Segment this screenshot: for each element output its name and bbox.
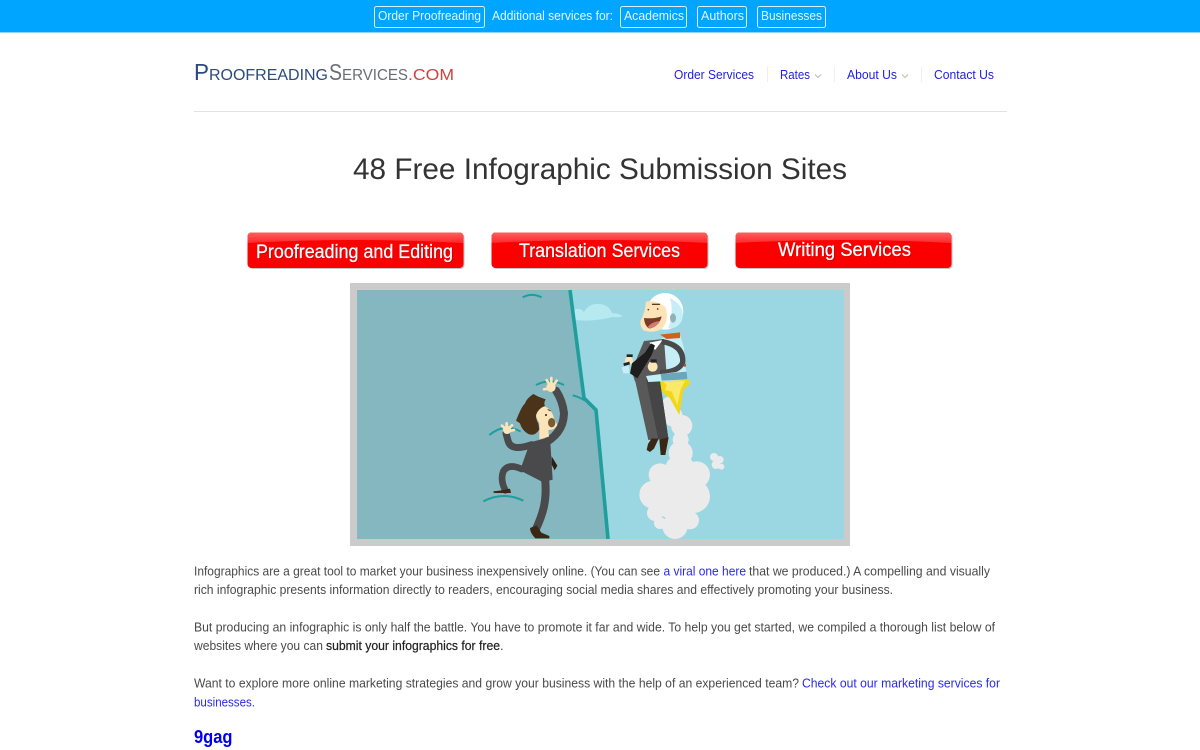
navigation menu bbox=[674, 67, 994, 82]
logo: P bbox=[194, 59, 209, 85]
red button: Proofreading and Editing: Proofreading and Editing bbox=[257, 242, 454, 264]
paragraph 1 bbox=[194, 564, 990, 597]
additional services label: Additional services for: bbox=[492, 9, 613, 23]
paragraph 2: websites where you can bbox=[193, 638, 323, 653]
shoes bbox=[647, 437, 669, 455]
top service bar bbox=[0, 0, 1200, 33]
button: Authors: Authors bbox=[701, 9, 744, 23]
cliff wall bbox=[357, 290, 608, 539]
logo: ROOFREADING bbox=[209, 67, 328, 84]
logo bbox=[194, 59, 454, 85]
heading: 9gag: 9gag bbox=[194, 727, 232, 747]
flames bbox=[655, 379, 691, 415]
paragraph 3: Want to explore more online marketing strategies and grow your business with the help of an experienced team? bbox=[194, 676, 799, 690]
scarf bbox=[660, 332, 680, 339]
red button: Writing Services bbox=[736, 232, 952, 269]
climbing man bbox=[483, 295, 585, 538]
button: Businesses bbox=[758, 6, 826, 28]
navigation menu: Order Services bbox=[674, 68, 754, 82]
button: Authors bbox=[698, 6, 746, 28]
link: marketing services: businesses. bbox=[194, 694, 255, 710]
arm bbox=[660, 342, 683, 373]
smoke bbox=[639, 396, 724, 539]
button: Order Proofreading: Order Proofreading bbox=[378, 9, 481, 23]
red button: Writing Services: Writing Services bbox=[779, 240, 912, 262]
jetpack man bbox=[622, 293, 724, 539]
link: marketing services: Check out our marketing services for bbox=[802, 676, 1001, 690]
paragraph 1: that we produced.) A compelling and visually bbox=[749, 564, 990, 578]
navigation menu: Contact Us bbox=[934, 68, 994, 82]
jacket bbox=[632, 339, 667, 382]
link: viral one: a viral one here bbox=[664, 564, 746, 578]
paragraph 1: Infographics are a great tool to market your business inexpensively online. (You can see bbox=[194, 564, 660, 578]
red button: Translation Services bbox=[492, 232, 708, 269]
jet pack bbox=[660, 335, 687, 381]
logo: ERVICES bbox=[342, 67, 408, 84]
hands bbox=[622, 365, 629, 373]
navigation menu: About Us bbox=[847, 68, 897, 82]
button: Academics bbox=[620, 6, 686, 28]
bold phrase: submit your infographics for free bbox=[326, 638, 500, 653]
button: Order Proofreading bbox=[374, 6, 484, 28]
button: Academics: Academics bbox=[624, 9, 684, 23]
navigation menu: Rates bbox=[780, 68, 810, 82]
paragraph 2: But producing an infographic is only half the battle. You have to promote it far and wide. To help you get started, we compiled a thorough list below of bbox=[194, 620, 995, 634]
paragraph 2: . bbox=[500, 638, 504, 653]
trousers bbox=[635, 377, 668, 440]
red button: Translation Services: Translation Services bbox=[520, 241, 681, 263]
illustration panel bbox=[350, 283, 850, 546]
button: Businesses: Businesses bbox=[761, 9, 822, 23]
logo: S bbox=[329, 59, 342, 85]
red button: Translation Services: Translation Services bbox=[519, 240, 680, 262]
title: 48 Free Infographic Submission Sites bbox=[353, 153, 847, 186]
paragraph 3 bbox=[194, 676, 1001, 710]
red button: Proofreading and Editing bbox=[248, 232, 464, 269]
logo: .COM bbox=[408, 67, 454, 84]
head and helmet bbox=[647, 293, 683, 330]
paragraph 1: rich infographic presents information directly to readers, encouraging social media shares and effectively promoting your business. bbox=[194, 582, 893, 597]
link: marketing services bbox=[194, 676, 1001, 710]
pack band bbox=[646, 371, 687, 382]
paragraph 2 bbox=[193, 620, 995, 653]
red button: Writing Services: Writing Services bbox=[778, 239, 911, 261]
red button: Proofreading and Editing: Proofreading and Editing bbox=[256, 241, 453, 263]
cloud bbox=[574, 304, 623, 321]
